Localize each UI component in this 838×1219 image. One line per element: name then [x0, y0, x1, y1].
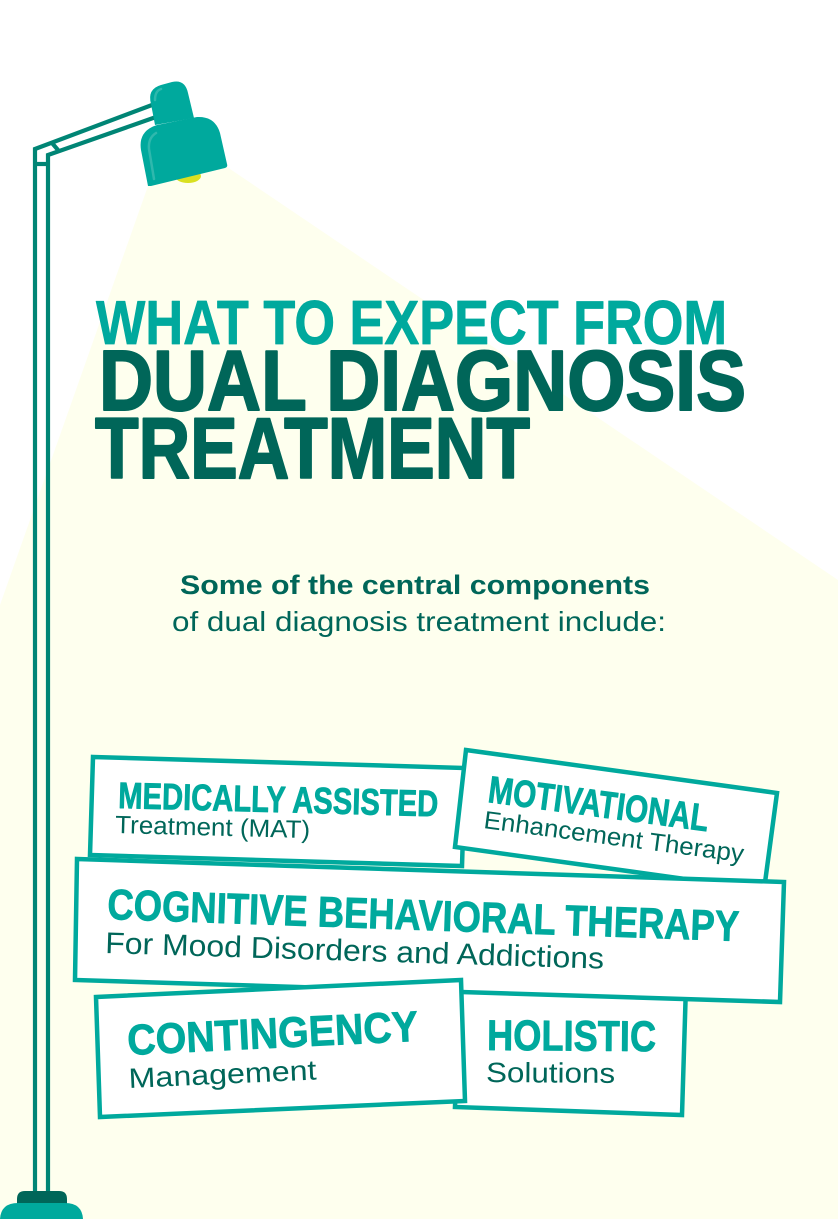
card subheading: Solutions — [486, 1057, 615, 1089]
card subheading: Enhancement Therapy — [482, 806, 746, 868]
card heading: MEDICALLY ASSISTED — [118, 775, 439, 824]
lamp base — [0, 1191, 83, 1219]
lamp bulb — [175, 169, 201, 183]
card: contingency management — [96, 980, 465, 1117]
card subheading: Management — [128, 1054, 317, 1094]
lamp neck — [150, 81, 194, 125]
title — [95, 289, 746, 497]
card subheading: Treatment (MAT) — [115, 811, 311, 844]
card heading: CONTINGENCY — [126, 1003, 419, 1065]
lamp pole — [34, 105, 156, 1192]
card heading: MOTIVATIONAL — [486, 769, 711, 840]
intro bold line: Some of the central components — [180, 570, 650, 600]
card subheading: For Mood Disorders and Addictions — [105, 927, 605, 976]
title line 2: DUAL DIAGNOSIS — [99, 334, 746, 429]
title line 3: TREATMENT — [95, 401, 530, 497]
intro regular line: of dual diagnosis treatment include: — [172, 606, 666, 637]
card heading: COGNITIVE BEHAVIORAL THERAPY — [107, 881, 740, 951]
card: cognitive behavioral therapy — [75, 859, 784, 1002]
icon: floor lamp — [0, 81, 227, 1219]
card: holistic solutions — [455, 980, 686, 1115]
card: motivational enhancement therapy — [455, 750, 777, 890]
lamp highlights — [149, 89, 161, 179]
card: medically assisted treatment — [90, 757, 465, 866]
intro text — [172, 570, 666, 637]
lamp shade — [141, 117, 227, 186]
title line 1: WHAT TO EXPECT FROM — [96, 289, 727, 358]
card heading: HOLISTIC — [487, 1012, 656, 1061]
